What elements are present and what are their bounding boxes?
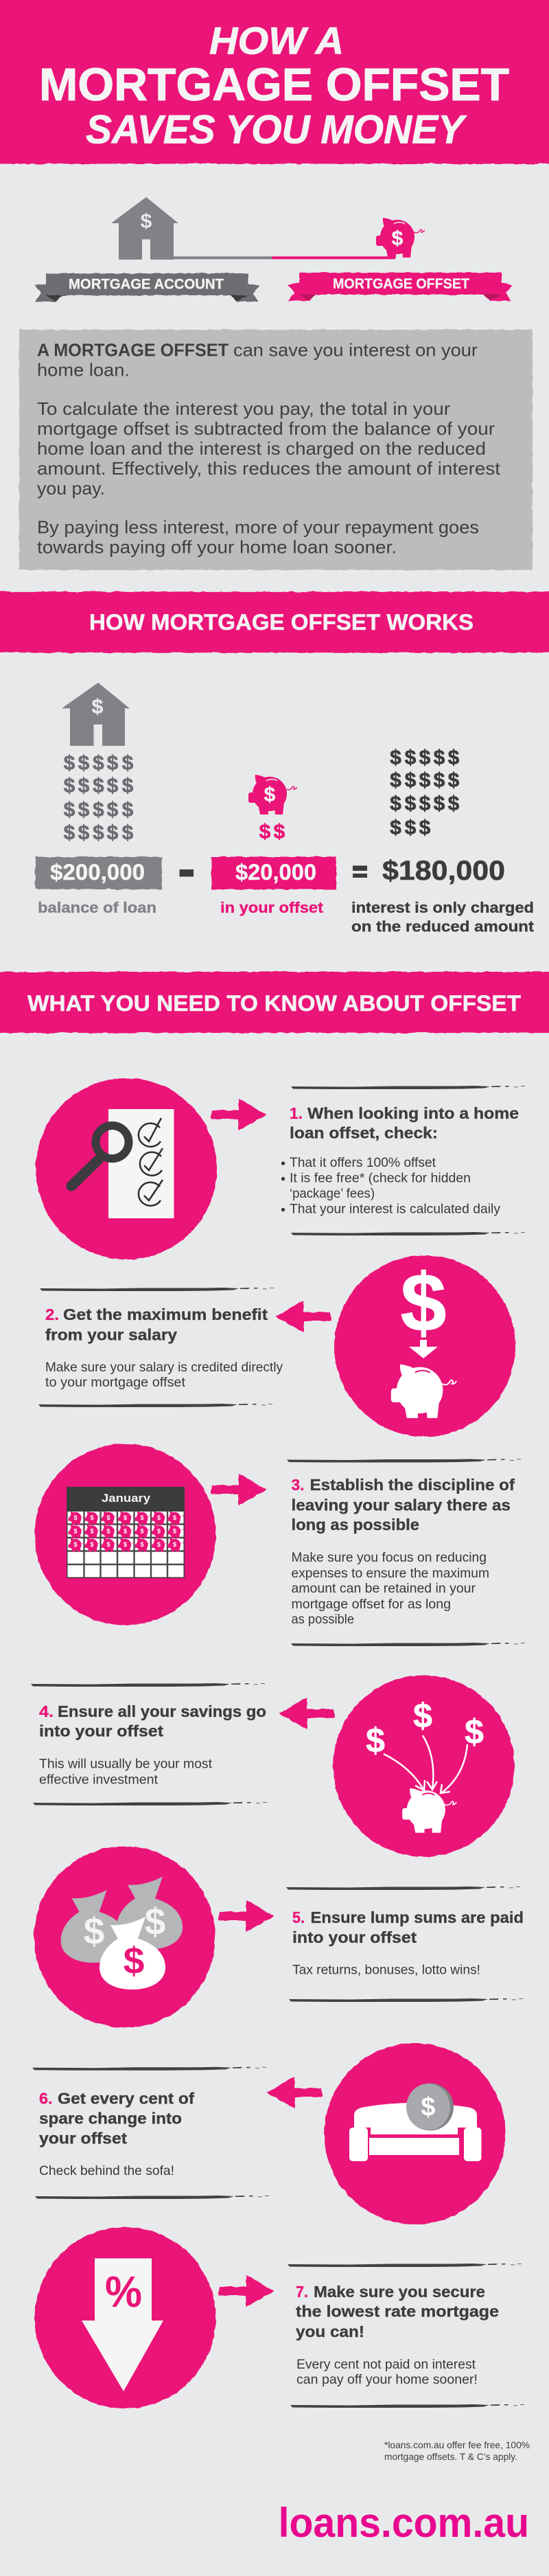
text block: step 1: loan offset, check:	[290, 1124, 438, 1142]
icon: house connected to piggy bank	[111, 197, 424, 260]
panel: explanation text: By paying less interest, more of your repayment goes	[37, 517, 479, 538]
icon: remaining dollars: $	[448, 793, 460, 815]
text block: step 4: This will usually be your most	[39, 1757, 213, 1772]
icon: remaining dollars: $	[405, 793, 417, 815]
icon: piggy bank with offset dollars	[248, 775, 296, 843]
text block: step 3: long as possible	[291, 1516, 419, 1534]
icon: house connected to piggy bank: $	[392, 227, 404, 250]
icon: house with loan dollars: $	[78, 822, 90, 845]
icon: remaining dollars: $	[448, 746, 460, 769]
equation: balance of loan: balance of loan	[38, 899, 156, 916]
icon: calendar of piggy banks: $	[173, 1514, 176, 1521]
text block: step 3: expenses to ensure the maximum	[291, 1566, 489, 1581]
title banner	[0, 0, 549, 163]
text block: step 4: 4.	[39, 1702, 54, 1720]
icon: house with loan dollars: $	[122, 822, 134, 845]
icon: house with loan dollars	[62, 683, 134, 845]
icon: house with loan dollars: $	[78, 799, 90, 821]
icon: calendar of piggy banks: $	[73, 1514, 78, 1521]
panel: explanation text: amount. Effectively, this reduces the amount of interest	[37, 458, 501, 479]
text block: step 1: ‘package’ fees)	[290, 1186, 375, 1201]
icon: calendar of piggy banks: $	[90, 1541, 94, 1548]
icon: house with loan dollars: $	[93, 822, 104, 845]
icon: calendar of piggy banks: $	[73, 1527, 78, 1534]
icon: dollars flowing into piggy bank: $	[465, 1713, 484, 1751]
icon: house connected to piggy bank: $	[141, 210, 152, 233]
text block: step 6: Get every cent of	[58, 2090, 194, 2108]
text block: step 2: 2.	[45, 1306, 59, 1323]
text block: step 2	[38, 1288, 283, 1407]
ribbon: mortgage offset: MORTGAGE OFFSET	[333, 276, 469, 292]
text block: step 5: into your offset	[292, 1928, 417, 1946]
icon: piggy bank with offset dollars: $	[274, 821, 285, 843]
arrow: step 1	[211, 1099, 267, 1130]
icon: piggy bank with offset dollars: $	[264, 784, 276, 806]
panel: explanation text: mortgage offset is subtracted from the balance of your	[37, 418, 495, 439]
text block: step 1: That it offers 100% offset	[290, 1155, 436, 1170]
equation: in your offset: in your offset	[220, 899, 324, 916]
icon: house with loan dollars: $	[107, 752, 119, 775]
equation: reduced amount: $180,000	[382, 856, 505, 886]
panel: explanation text: can save you interest on your	[233, 340, 478, 361]
text block: step 3: amount can be retained in your	[291, 1581, 476, 1596]
icon: remaining dollars: $	[434, 769, 445, 792]
panel: explanation text: home loan and the interest is charged on the reduced	[37, 438, 486, 459]
icon: dollar into piggy bank	[334, 1255, 515, 1437]
icon: dollars flowing into piggy bank: $	[366, 1721, 385, 1759]
icon: house with loan dollars: $	[107, 822, 119, 845]
text block: step 1: That your interest is calculated daily	[290, 1202, 500, 1217]
icon: calendar of piggy banks: $	[157, 1514, 161, 1521]
icon: calendar of piggy banks: January	[102, 1492, 151, 1505]
text block: step 2: from your salary	[45, 1326, 177, 1344]
icon: dollars flowing into piggy bank	[334, 1676, 515, 1857]
panel: explanation text: To calculate the interest you pay, the total in your	[37, 398, 450, 419]
icon: house with loan dollars: $	[122, 775, 134, 797]
arrow: step 7	[219, 2275, 274, 2307]
icon: house with loan dollars: $	[78, 752, 90, 775]
icon: remaining dollars: $	[405, 769, 417, 792]
icon: calendar of piggy banks: $	[124, 1514, 127, 1521]
icon: calendar of piggy banks: $	[140, 1541, 144, 1548]
icon: remaining dollars: $	[434, 793, 445, 815]
text block: step 3	[287, 1459, 525, 1646]
icon: calendar of piggy banks: $	[140, 1514, 144, 1521]
text block: step 1: When looking into a home	[307, 1104, 519, 1122]
arrow: step 5	[219, 1900, 274, 1932]
icon: house with loan dollars: $	[107, 775, 119, 797]
text block: step 4: effective investment	[39, 1772, 159, 1787]
icon: house with loan dollars: $	[122, 799, 134, 821]
section heading: what you need to know	[0, 972, 549, 1033]
text block: step 1: 1.	[290, 1104, 303, 1122]
icon: house with loan dollars: $	[122, 752, 134, 775]
icon: remaining dollars: $	[390, 817, 401, 839]
panel: explanation text: A MORTGAGE OFFSET	[37, 340, 229, 361]
icon: calendar of piggy banks: $	[157, 1541, 161, 1548]
text block: step 3: Establish the discipline of	[310, 1476, 515, 1494]
icon: calendar of piggy banks: $	[73, 1541, 78, 1548]
text block: step 5: Tax returns, bonuses, lotto wins!	[292, 1963, 480, 1978]
arrow: step 2	[275, 1301, 331, 1332]
icon: dollar into piggy bank: $	[401, 1257, 446, 1349]
icon: calendar of piggy banks: $	[124, 1541, 127, 1548]
equation: balance of loan: $200,000	[50, 860, 145, 885]
section heading: how mortgage offset works	[0, 592, 549, 652]
equation: balance of loan	[36, 857, 162, 916]
icon: remaining dollars	[390, 746, 460, 839]
title banner: HOW A	[209, 19, 344, 62]
text block: step 7: 7.	[296, 2283, 308, 2301]
ribbon: mortgage account	[35, 273, 259, 301]
text block: step 7: Make sure you secure	[314, 2283, 485, 2301]
text block: step 5	[286, 1887, 524, 2002]
equation: reduced amount: interest is only charged	[351, 899, 534, 916]
text block: step 7: Every cent not paid on interest	[296, 2357, 476, 2372]
icon: remaining dollars: $	[419, 746, 431, 769]
panel: explanation text: you pay.	[37, 478, 105, 499]
icon: house with loan dollars: $	[93, 799, 104, 821]
icon: remaining dollars: $	[390, 793, 401, 815]
equation: reduced amount: on the reduced amount	[351, 918, 535, 935]
footnote	[384, 2439, 530, 2462]
text block: step 3: leaving your salary there as	[291, 1496, 511, 1514]
panel: explanation text: home loan.	[37, 359, 130, 380]
panel: explanation text: towards paying off your home loan sooner.	[37, 536, 397, 557]
text block: step 5: Ensure lump sums are paid	[310, 1908, 524, 1926]
icon: calendar of piggy banks	[34, 1444, 215, 1625]
icon: money bags	[34, 1847, 215, 2028]
text block: step 6	[32, 2067, 269, 2199]
text block: step 6: Check behind the sofa!	[39, 2163, 174, 2178]
text block: step 6: your offset	[39, 2130, 127, 2147]
icon: remaining dollars: $	[390, 746, 401, 769]
text block: step 4	[31, 1683, 267, 1805]
arrow: step 4	[279, 1698, 334, 1729]
icon: house with loan dollars: $	[64, 822, 75, 845]
icon: house with loan dollars: $	[64, 752, 75, 775]
icon: dollars flowing into piggy bank: $	[413, 1696, 432, 1735]
footnote: mortgage offsets. T & C’s apply.	[384, 2451, 517, 2462]
icon: checklist and magnifier	[36, 1078, 217, 1259]
text block: step 6: 6.	[39, 2090, 52, 2108]
icon: remaining dollars: $	[419, 817, 431, 839]
icon: remaining dollars: $	[405, 817, 417, 839]
icon: calendar of piggy banks: $	[90, 1514, 94, 1521]
icon: money bags: $	[145, 1900, 165, 1943]
section heading: how mortgage offset works: HOW MORTGAGE OFFSET WORKS	[89, 610, 474, 635]
text block: step 7: you can!	[296, 2323, 364, 2340]
icon: money bags: $	[84, 1910, 104, 1952]
equation: reduced amount	[351, 856, 535, 935]
icon: calendar of piggy banks: $	[90, 1527, 94, 1534]
arrow: step 6	[266, 2077, 322, 2108]
section heading: what you need to know: WHAT YOU NEED TO KNOW ABOUT OFFSET	[27, 991, 521, 1016]
text block: step 1	[281, 1086, 525, 1235]
text block: step 3: 3.	[291, 1476, 305, 1494]
icon: coin behind sofa: $	[421, 2093, 436, 2122]
text block: step 7	[288, 2264, 524, 2408]
icon: calendar of piggy banks: $	[106, 1527, 110, 1534]
icon: remaining dollars: $	[448, 769, 460, 792]
equation: equals sign	[353, 865, 367, 878]
text block: step 5: 5.	[292, 1908, 305, 1926]
arrow: step 3	[211, 1474, 267, 1505]
ribbon: mortgage offset	[288, 273, 513, 301]
equation: in your offset	[211, 857, 336, 916]
equation: in your offset: $20,000	[235, 860, 316, 885]
text block: step 7: can pay off your home sooner!	[296, 2372, 478, 2387]
panel: explanation text	[19, 330, 533, 570]
icon: calendar of piggy banks: $	[124, 1527, 127, 1534]
icon: remaining dollars: $	[419, 769, 431, 792]
icon: remaining dollars: $	[405, 746, 417, 769]
icon: calendar of piggy banks: $	[173, 1527, 176, 1534]
icon: calendar of piggy banks: $	[173, 1541, 176, 1548]
title banner: MORTGAGE OFFSET	[39, 59, 509, 111]
icon: house with loan dollars: $	[92, 696, 104, 718]
icon: falling rate arrow: %	[105, 2267, 142, 2316]
icon: calendar of piggy banks: $	[140, 1527, 144, 1534]
icon: house with loan dollars: $	[64, 799, 75, 821]
text block: step 3: mortgage offset for as long	[291, 1597, 451, 1612]
icon: coin behind sofa	[324, 2043, 505, 2224]
text block: step 2: Make sure your salary is credited directly	[45, 1360, 283, 1375]
text block: step 2: Get the maximum benefit	[63, 1306, 268, 1323]
icon: house with loan dollars: $	[107, 799, 119, 821]
equation: minus sign	[180, 869, 194, 876]
text block: step 4: Ensure all your savings go	[58, 1702, 266, 1720]
title banner: SAVES YOU MONEY	[86, 108, 467, 152]
icon: house with loan dollars: $	[93, 752, 104, 775]
text block: step 1: It is fee free* (check for hidden	[290, 1171, 471, 1186]
icon: money bags: $	[124, 1939, 144, 1982]
icon: remaining dollars: $	[419, 793, 431, 815]
text block: step 2: to your mortgage offset	[45, 1375, 186, 1390]
icon: calendar of piggy banks: $	[157, 1527, 161, 1534]
icon: remaining dollars: $	[434, 746, 445, 769]
text block: step 3: as possible	[291, 1612, 354, 1627]
icon: house with loan dollars: $	[64, 775, 75, 797]
icon: falling rate arrow	[34, 2227, 215, 2408]
icon: piggy bank with offset dollars: $	[259, 821, 271, 843]
icon: calendar of piggy banks: $	[106, 1541, 110, 1548]
text block: step 4: into your offset	[39, 1722, 163, 1740]
icon: calendar of piggy banks: $	[106, 1514, 110, 1521]
ribbon: mortgage account: MORTGAGE ACCOUNT	[69, 277, 224, 293]
text block: step 7: the lowest rate mortgage	[296, 2303, 499, 2321]
text block: step 6: spare change into	[39, 2110, 182, 2128]
icon: house with loan dollars: $	[78, 775, 90, 797]
icon: remaining dollars: $	[390, 769, 401, 792]
footnote: *loans.com.au offer fee free, 100%	[384, 2439, 530, 2450]
icon: house with loan dollars: $	[93, 775, 104, 797]
logo: loans.com.au: loans.com.au	[279, 2500, 529, 2546]
text block: step 3: Make sure you focus on reducing	[291, 1550, 487, 1565]
